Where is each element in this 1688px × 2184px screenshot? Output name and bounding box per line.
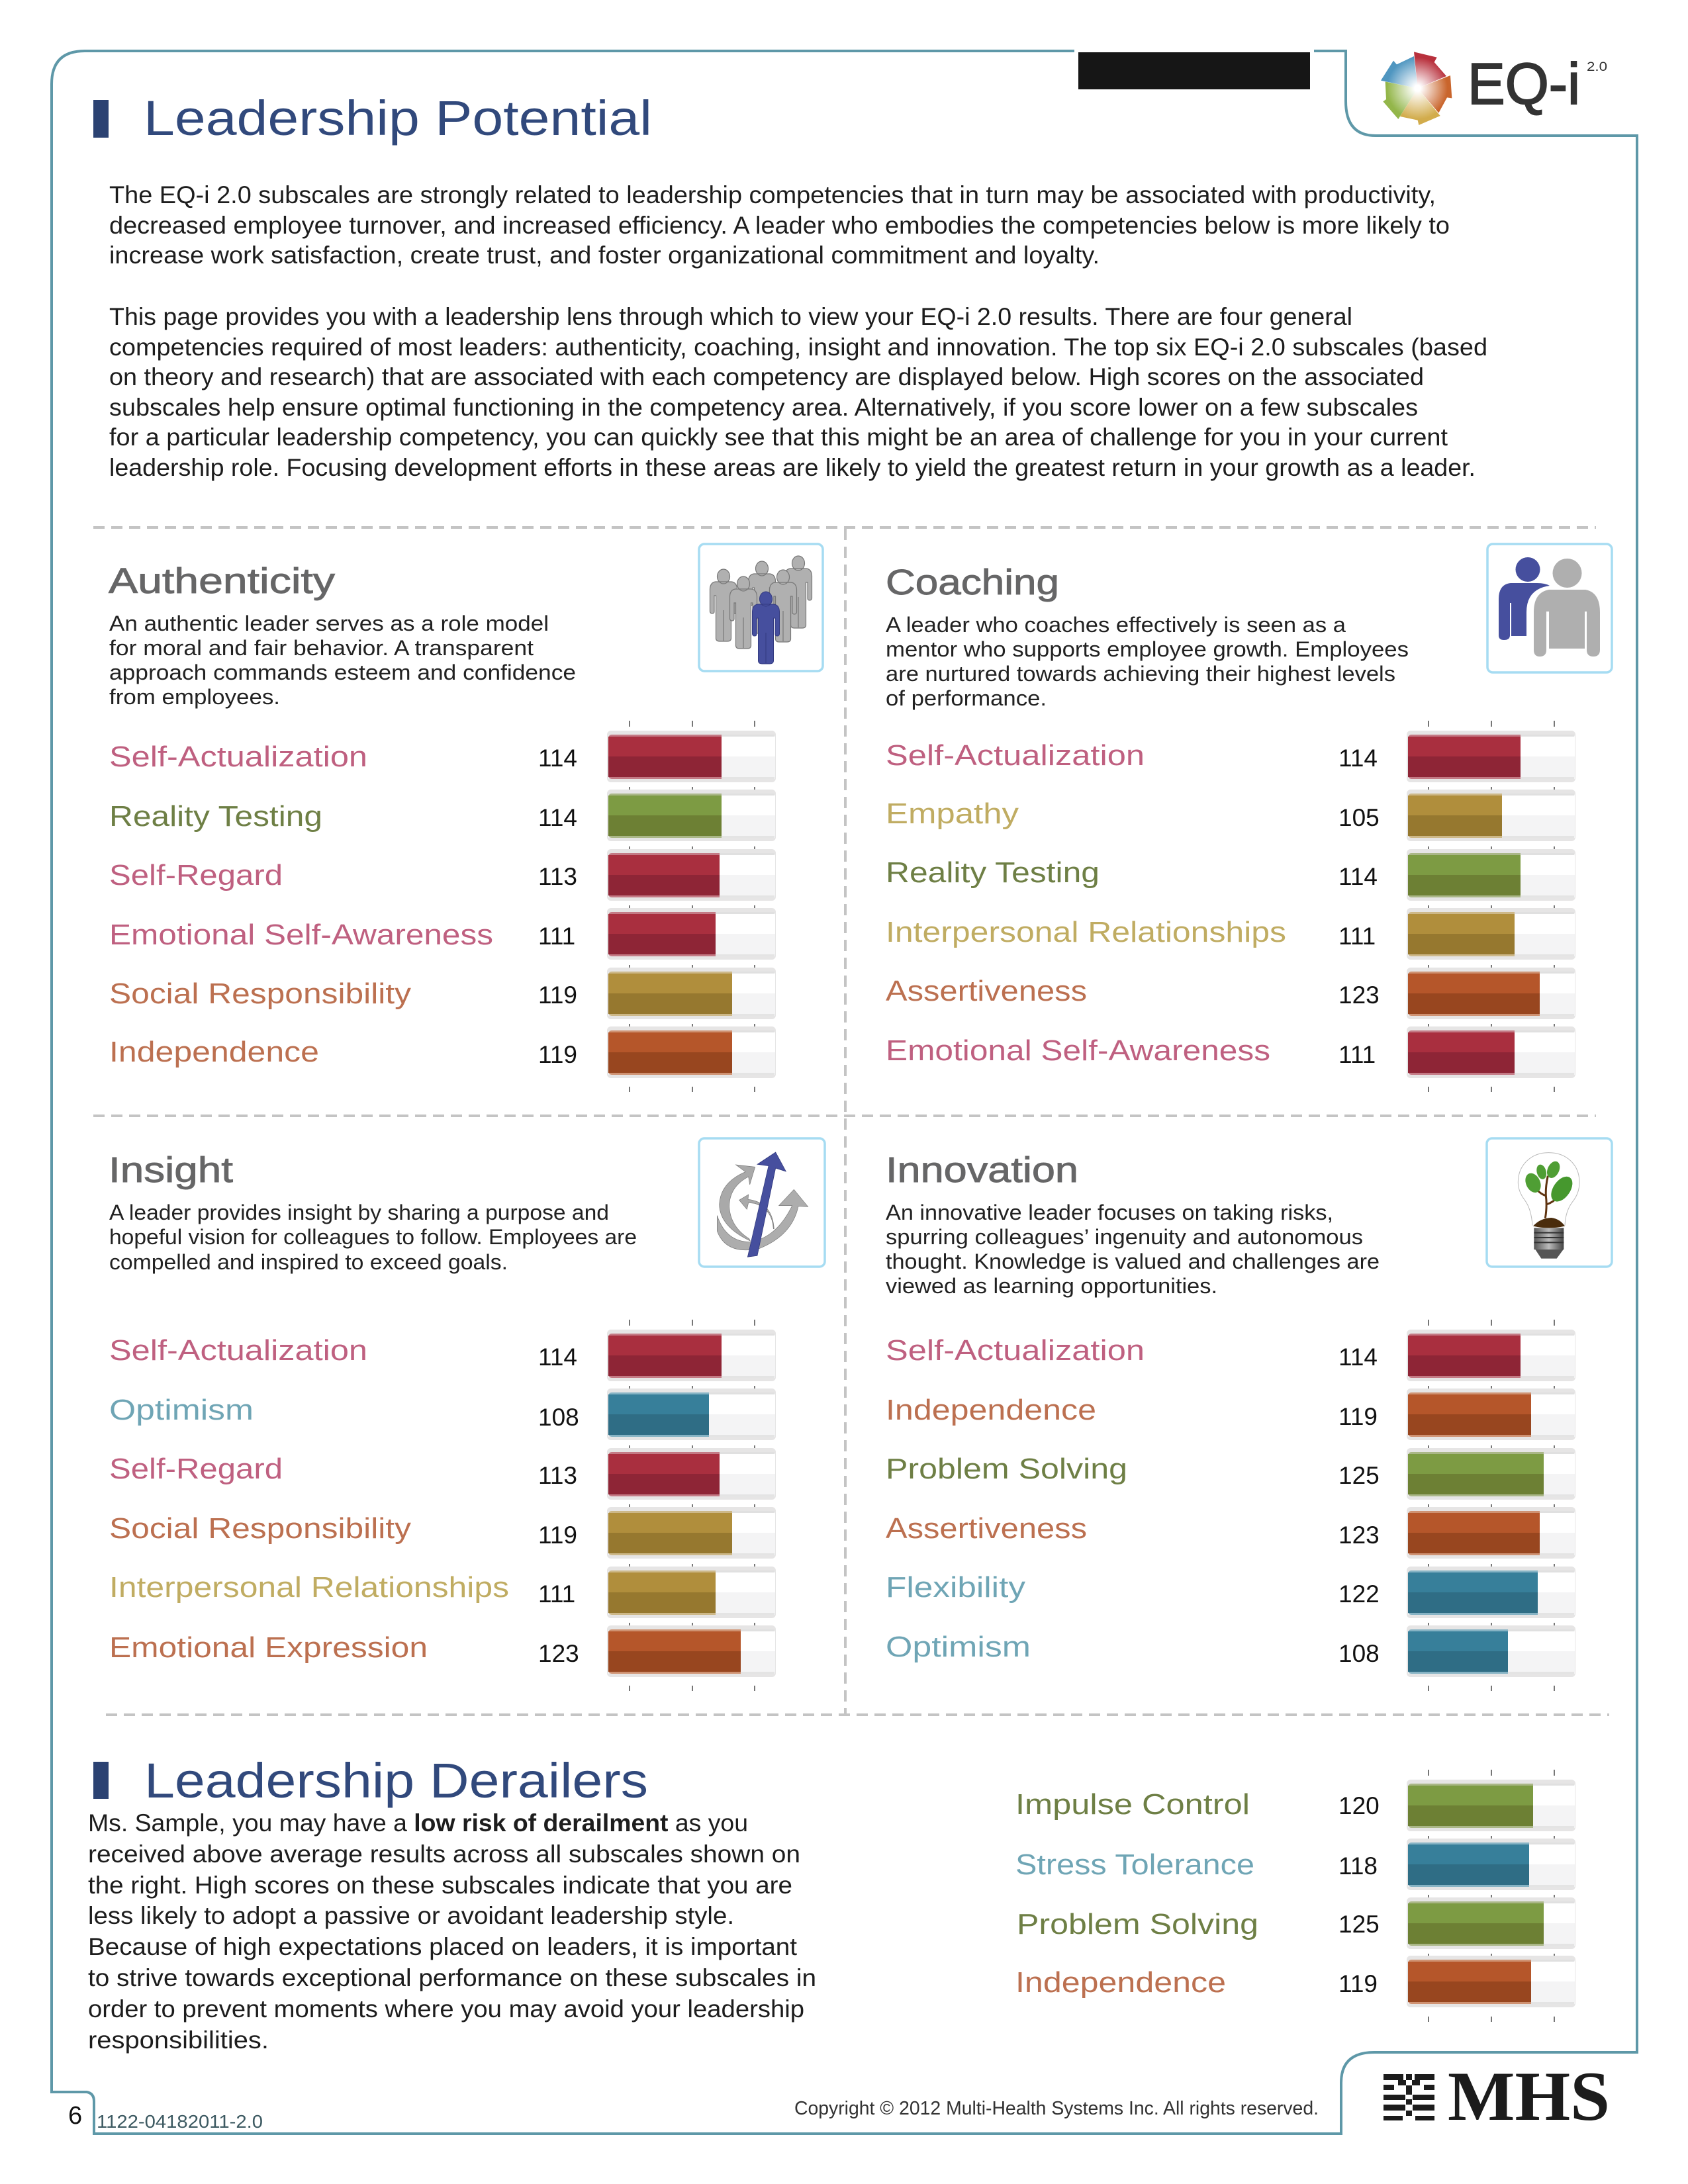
- row: Self-Actualization 114: [109, 1330, 776, 1381]
- row: Optimism 108: Optimism: [109, 1394, 254, 1426]
- icon: mentor and employee: [1487, 544, 1612, 672]
- row: Flexibility 122: 122: [1338, 1580, 1380, 1608]
- logo wordmark: MHS: [1448, 2058, 1610, 2135]
- row: Reality Testing 114: [886, 849, 1575, 901]
- form code: 1122-04182011-2.0: [97, 2111, 263, 2132]
- description: Innovation: [886, 1201, 1380, 1298]
- row: Emotional Expression 123: [109, 1625, 776, 1677]
- logo: MHS: [1383, 2058, 1610, 2135]
- text: derailers description: less likely to adopt a passive or avoidant leadership style.: [88, 1902, 734, 1929]
- text: derailers description: the right. High scores on these subscales indicate that you are: [88, 1872, 792, 1899]
- row: Independence 119: [1015, 1956, 1575, 2007]
- row: Independence 119: Independence: [886, 1394, 1096, 1426]
- row: Self-Actualization 114: 114: [538, 1343, 577, 1371]
- redacted name block: [1078, 52, 1310, 89]
- panel: Authenticity: [109, 544, 823, 1092]
- row: Interpersonal Relationships 111: 111: [1338, 923, 1376, 950]
- row: Independence 119: Independence: [109, 1036, 319, 1068]
- row: Social Responsibility 119: [109, 968, 776, 1019]
- bar scale ticks: [1429, 1770, 1554, 2022]
- row: Independence 119: 119: [1338, 1970, 1378, 1997]
- row: Optimism 108: 108: [538, 1404, 579, 1431]
- row: Emotional Self-Awareness 111: [109, 908, 776, 960]
- intro text: leadership role. Focusing development efforts in these areas are likely to yield the greatest return in your growth as a leader.: [109, 454, 1476, 481]
- row: Interpersonal Relationships 111: [886, 908, 1575, 960]
- description: Innovation: spurring colleagues’ ingenuity and autonomous: [886, 1225, 1363, 1249]
- intro text: competencies required of most leaders: authenticity, coaching, insight and innovation. The top six EQ-i 2.0 subscales (based: [109, 334, 1487, 361]
- row: Emotional Self-Awareness 111: 111: [1338, 1041, 1376, 1068]
- page number: 6: [68, 2102, 82, 2130]
- row: Stress Tolerance 118: [1015, 1839, 1575, 1890]
- row: Assertiveness 123: [886, 968, 1575, 1019]
- text: derailers description: to strive towards exceptional performance on these subscales in: [88, 1964, 816, 1991]
- intro text: decreased employee turnover, and increased efficiency. A leader who embodies the competencies below is more likely to: [109, 212, 1450, 239]
- row: Empathy 105: [886, 790, 1575, 841]
- row: Interpersonal Relationships 111: Interpersonal Relationships: [109, 1571, 509, 1604]
- logo wordmark: EQ-i: [1468, 51, 1580, 116]
- row: Reality Testing 114: Reality Testing: [886, 856, 1100, 889]
- row: Reality Testing 114: [109, 790, 776, 841]
- row: Social Responsibility 119: Social Responsibility: [109, 1512, 411, 1545]
- row: Social Responsibility 119: Social Responsibility: [109, 978, 411, 1010]
- row: Self-Actualization 114: 114: [1338, 1343, 1378, 1371]
- text: derailers description: Because of high expectations placed on leaders, it is important: [88, 1933, 798, 1960]
- description: Authenticity: approach commands esteem and confidence: [109, 660, 576, 684]
- text: derailers description: Ms. Sample, you may have a low risk of derailment as you: [88, 1809, 748, 1837]
- icon: leader and group of people: [699, 544, 823, 671]
- panel: Coaching: [886, 544, 1612, 1092]
- row: Self-Regard 113: [109, 1448, 776, 1500]
- text: derailers description: [88, 1809, 816, 2054]
- row: Self-Regard 113: 113: [538, 863, 577, 890]
- row: Self-Actualization 114: [886, 731, 1575, 782]
- row: Impulse Control 120: 120: [1338, 1792, 1380, 1819]
- row: Self-Actualization 114: Self-Actualization: [886, 739, 1145, 772]
- row: Self-Regard 113: Self-Regard: [109, 1453, 283, 1485]
- description: Insight: A leader provides insight by sharing a purpose and: [109, 1201, 609, 1224]
- heading: Innovation: Innovation: [886, 1150, 1078, 1190]
- intro text: on theory and research) that are associated with each competency are displayed below. High scores on the associated: [109, 363, 1424, 390]
- bar scale ticks: [1429, 721, 1554, 1092]
- row: Self-Actualization 114: Self-Actualization: [109, 1334, 367, 1367]
- icon: MHS emblem: [1383, 2074, 1434, 2120]
- description: Innovation: viewed as learning opportunities.: [886, 1274, 1217, 1298]
- row: Self-Regard 113: Self-Regard: [109, 859, 283, 891]
- logo: EQ-i 2.0: [1381, 51, 1607, 125]
- row: Problem Solving 125: [1017, 1897, 1575, 1949]
- row: Empathy 105: 105: [1338, 804, 1380, 831]
- intro text: The EQ-i 2.0 subscales are strongly related to leadership competencies that in turn may be associated with productivity,: [109, 181, 1436, 208]
- description: Coaching: mentor who supports employee growth. Employees: [886, 637, 1409, 661]
- row: Optimism 108: Optimism: [886, 1631, 1031, 1663]
- description: Authenticity: An authentic leader serves as a role model: [109, 612, 549, 635]
- row: Emotional Self-Awareness 111: Emotional Self-Awareness: [886, 1034, 1270, 1067]
- row: Social Responsibility 119: 119: [538, 1522, 577, 1549]
- row: Interpersonal Relationships 111: [109, 1567, 776, 1618]
- intro text: increase work satisfaction, create trust, and foster organizational commitment and loyalty.: [109, 242, 1100, 269]
- row: Social Responsibility 119: [109, 1507, 776, 1559]
- row: Self-Actualization 114: 114: [538, 745, 577, 772]
- row: Independence 119: Independence: [1015, 1966, 1226, 1999]
- row: Reality Testing 114: Reality Testing: [109, 800, 322, 833]
- row: Independence 119: [886, 1388, 1575, 1440]
- row: Self-Actualization 114: [886, 1330, 1575, 1381]
- row: Stress Tolerance 118: Stress Tolerance: [1015, 1848, 1254, 1881]
- row: Assertiveness 123: Assertiveness: [886, 975, 1087, 1007]
- icon: circular arrows with blue arrow: [699, 1138, 825, 1267]
- row: Problem Solving 125: Problem Solving: [886, 1453, 1127, 1485]
- row: Optimism 108: [109, 1388, 776, 1440]
- row: Independence 119: 119: [1338, 1403, 1378, 1430]
- row: Emotional Expression 123: Emotional Expression: [109, 1631, 428, 1664]
- heading: Insight: Insight: [109, 1150, 233, 1190]
- row: Self-Actualization 114: Self-Actualization: [109, 741, 367, 773]
- row: Flexibility 122: [886, 1567, 1575, 1618]
- row: Assertiveness 123: Assertiveness: [886, 1512, 1087, 1545]
- description: Insight: [109, 1201, 637, 1274]
- bar scale ticks: [630, 1320, 755, 1691]
- text: derailers description: responsibilities.: [88, 2026, 269, 2054]
- heading: Coaching: Coaching: [886, 563, 1059, 602]
- text: derailers description: order to prevent moments where you may avoid your leadership: [88, 1995, 804, 2023]
- row: Independence 119: 119: [538, 1041, 577, 1068]
- heading: Authenticity: Authenticity: [109, 561, 335, 601]
- row: Emotional Self-Awareness 111: [886, 1026, 1575, 1078]
- row: Emotional Self-Awareness 111: 111: [538, 923, 575, 950]
- row: Self-Actualization 114: Self-Actualization: [886, 1334, 1145, 1367]
- row: Reality Testing 114: 114: [538, 804, 577, 831]
- row: Problem Solving 125: Problem Solving: [1017, 1908, 1258, 1940]
- intro text: [109, 181, 1487, 481]
- row: Impulse Control 120: [1015, 1780, 1575, 1831]
- logo version: 2.0: [1587, 60, 1607, 74]
- row: Self-Regard 113: [109, 849, 776, 901]
- row: Interpersonal Relationships 111: 111: [538, 1580, 575, 1608]
- row: Self-Actualization 114: 114: [1338, 745, 1378, 772]
- row: Assertiveness 123: 123: [1338, 1522, 1380, 1549]
- intro text: This page provides you with a leadership lens through which to view your EQ-i 2.0 results. There are four general: [109, 303, 1352, 330]
- panel: Leadership Derailers: [88, 1753, 1575, 2054]
- row: Problem Solving 125: [886, 1448, 1575, 1500]
- row: Emotional Expression 123: 123: [538, 1640, 579, 1667]
- description: Innovation: An innovative leader focuses on taking risks,: [886, 1201, 1333, 1224]
- row: Interpersonal Relationships 111: Interpersonal Relationships: [886, 916, 1286, 948]
- row: Problem Solving 125: 125: [1338, 1911, 1380, 1938]
- description: Coaching: A leader who coaches effectively is seen as a: [886, 613, 1346, 637]
- bar scale ticks: [630, 721, 755, 1092]
- text: derailers description: received above average results across all subscales shown on: [88, 1841, 800, 1868]
- panel: Innovation: [886, 1138, 1612, 1691]
- row: Reality Testing 114: 114: [1338, 863, 1378, 890]
- row: Empathy 105: Empathy: [886, 797, 1019, 830]
- description: Authenticity: [109, 612, 576, 709]
- row: Independence 119: [109, 1026, 776, 1078]
- heading: Leadership Derailers: Leadership Derailers: [144, 1753, 648, 1808]
- row: Impulse Control 120: Impulse Control: [1015, 1788, 1250, 1821]
- bar scale ticks: [1429, 1320, 1554, 1691]
- row: Assertiveness 123: 123: [1338, 981, 1380, 1009]
- description: Innovation: thought. Knowledge is valued and challenges are: [886, 1250, 1380, 1273]
- description: Authenticity: for moral and fair behavior. A transparent: [109, 636, 534, 660]
- panel: Insight: [109, 1138, 825, 1691]
- row: Social Responsibility 119: 119: [538, 981, 577, 1009]
- intro text: subscales help ensure optimal functioning in the competency area. Alternatively, if you score lower on a few subscales: [109, 394, 1418, 421]
- row: Optimism 108: 108: [1338, 1640, 1380, 1667]
- row: Stress Tolerance 118: 118: [1338, 1852, 1378, 1880]
- icon: light bulb with plant: [1487, 1138, 1612, 1267]
- heading: Leadership Potential: Leadership Potential: [144, 91, 652, 146]
- description: Coaching: are nurtured towards achieving their highest levels: [886, 662, 1395, 686]
- row: Flexibility 122: Flexibility: [886, 1571, 1025, 1604]
- intro text: for a particular leadership competency, you can quickly see that this might be an area of challenge for you in your current: [109, 424, 1448, 451]
- icon: colour wheel: [1381, 52, 1452, 125]
- description: Insight: compelled and inspired to exceed goals.: [109, 1250, 508, 1274]
- row: Self-Regard 113: 113: [538, 1462, 577, 1489]
- copyright: Copyright © 2012 Multi-Health Systems Inc. All rights reserved.: [794, 2098, 1319, 2119]
- description: Authenticity: from employees.: [109, 685, 280, 709]
- row: Optimism 108: [886, 1625, 1575, 1677]
- row: Emotional Self-Awareness 111: Emotional Self-Awareness: [109, 919, 493, 951]
- description: Coaching: [886, 613, 1409, 710]
- row: Problem Solving 125: 125: [1338, 1462, 1380, 1489]
- row: Assertiveness 123: [886, 1507, 1575, 1559]
- description: Coaching: of performance.: [886, 686, 1047, 710]
- description: Insight: hopeful vision for colleagues to follow. Employees are: [109, 1225, 637, 1249]
- row: Self-Actualization 114: [109, 731, 776, 782]
